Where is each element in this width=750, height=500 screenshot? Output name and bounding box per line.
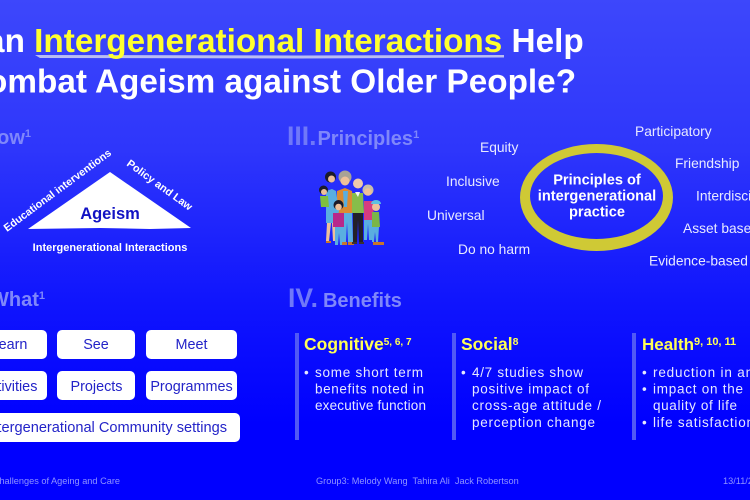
box: programmes: Programmes bbox=[150, 379, 233, 395]
column: cognitive: • bbox=[304, 365, 309, 380]
heading: how: 1 bbox=[25, 128, 31, 140]
triangle label: Ageism bbox=[80, 205, 140, 223]
box: learn bbox=[0, 330, 47, 359]
side label: policy and law: Policy and Law bbox=[124, 158, 195, 214]
column: health: • bbox=[642, 382, 647, 396]
box: activities bbox=[0, 371, 47, 400]
column: social: cross-age attitude / bbox=[472, 398, 601, 413]
column: health: 9, 10, 11 bbox=[694, 336, 736, 348]
box: intergenerational community settings bbox=[0, 413, 240, 442]
heading: principles: III.Principles bbox=[287, 121, 413, 151]
icon: family group bbox=[319, 170, 384, 245]
principle: participatory: Participatory bbox=[635, 124, 712, 139]
column: cognitive: some short term bbox=[315, 365, 423, 380]
heading: what: 1 bbox=[39, 290, 45, 302]
ring: principles of intergenerational practice: intergenerational bbox=[538, 188, 656, 204]
ring: principles of intergenerational practice: practice bbox=[569, 204, 625, 220]
ring: principles of intergenerational practice bbox=[520, 144, 673, 251]
column: social: • bbox=[461, 365, 466, 380]
footer bbox=[0, 476, 750, 486]
box: see bbox=[57, 330, 135, 359]
principle: do no harm: Do no harm bbox=[458, 242, 530, 257]
column: social: 8 bbox=[513, 336, 519, 348]
panel: how bbox=[0, 127, 195, 254]
title bbox=[0, 23, 584, 100]
panel: benefits bbox=[288, 283, 750, 440]
column: cognitive bbox=[295, 333, 426, 440]
column: social: positive impact of bbox=[472, 382, 589, 396]
column: cognitive: Cognitive bbox=[304, 334, 384, 354]
column: cognitive: 5, 6, 7 bbox=[384, 337, 412, 348]
heading: benefits: IV.Benefits bbox=[288, 283, 402, 313]
principle: friendship: Friendship bbox=[675, 156, 740, 171]
base label: Intergenerational Interactions bbox=[33, 242, 187, 254]
column: social: perception change bbox=[472, 415, 595, 430]
column: cognitive: benefits noted in bbox=[315, 382, 424, 396]
box: programmes bbox=[146, 371, 237, 400]
box: meet bbox=[146, 330, 237, 359]
footer: Group3: Melody Wang Tahira Ali Jack Robertson bbox=[316, 476, 519, 486]
column: social: Social bbox=[461, 334, 513, 354]
principle: universal: Universal bbox=[427, 208, 485, 223]
column: health: quality of life bbox=[653, 398, 737, 413]
column: health: • bbox=[642, 415, 647, 430]
column: health bbox=[632, 333, 750, 440]
column: social: 4/7 studies show bbox=[472, 365, 583, 380]
side label: educational interventions: Educational interventions bbox=[2, 147, 114, 234]
column: cognitive: executive function bbox=[315, 398, 426, 413]
column: social bbox=[452, 333, 601, 440]
panel: what bbox=[0, 289, 240, 442]
ring: principles of intergenerational practice: Principles of bbox=[553, 172, 641, 188]
box: see: See bbox=[83, 337, 109, 353]
panel: principles bbox=[287, 121, 750, 268]
principle: equity: Equity bbox=[480, 140, 518, 155]
column: health: impact on the bbox=[653, 382, 743, 396]
box: projects bbox=[57, 371, 135, 400]
box: meet: Meet bbox=[176, 337, 208, 353]
heading: principles: 1 bbox=[413, 129, 419, 141]
principle: inclusive: Inclusive bbox=[446, 174, 500, 189]
column: health: • bbox=[642, 365, 647, 380]
column: health: Health bbox=[642, 335, 694, 354]
principle: evidence-based: Evidence-based bbox=[649, 254, 748, 268]
triangle: ageism bbox=[28, 172, 191, 229]
box: projects: Projects bbox=[71, 379, 122, 395]
